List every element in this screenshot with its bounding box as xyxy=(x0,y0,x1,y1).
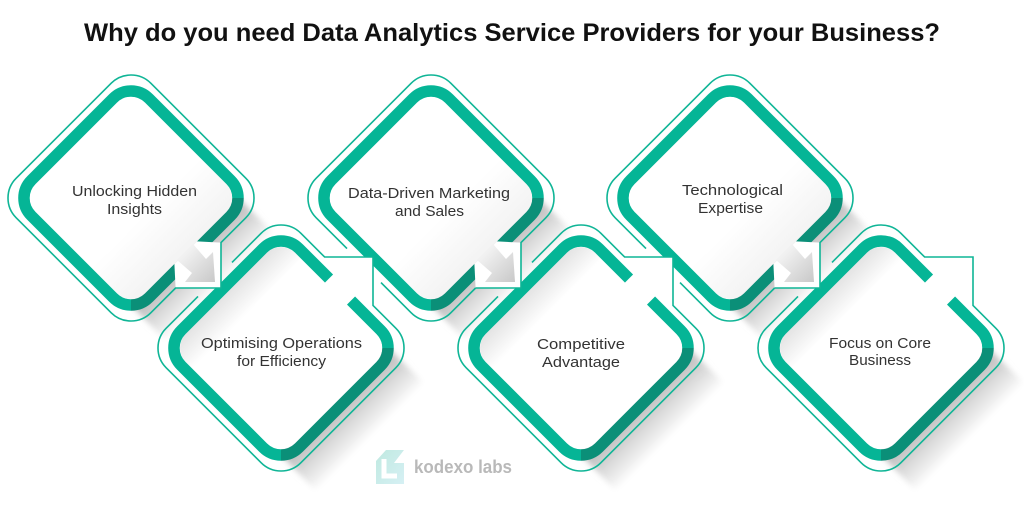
logo: kodexo labs: kodexo labs xyxy=(414,457,512,477)
panel: Focus on Core Business: Business xyxy=(849,353,911,369)
panel: Data-Driven Marketing and Sales: and Sales xyxy=(395,204,464,220)
panel: Data-Driven Marketing and Sales xyxy=(308,75,554,321)
panel: Focus on Core Business: Focus on Core xyxy=(829,336,931,352)
title: Why do you need Data Analytics Service Providers for your Business? xyxy=(84,19,940,47)
drop shadows behind the diamonds xyxy=(131,198,1023,490)
panel: Unlocking Hidden Insights: Insights xyxy=(107,202,162,218)
panel: Technological Expertise xyxy=(607,75,853,321)
icon: logo mark xyxy=(376,450,404,484)
panel: Unlocking Hidden Insights xyxy=(8,75,254,321)
panel: Competitive Advantage: Advantage xyxy=(542,355,620,371)
panel: Optimising Operations for Efficiency xyxy=(158,225,404,471)
panel: Competitive Advantage: Competitive xyxy=(537,337,625,353)
panel: Optimising Operations for Efficiency: for Efficiency xyxy=(237,354,327,370)
logo: kodexo labs xyxy=(376,450,512,484)
panel: Competitive Advantage xyxy=(458,225,704,471)
panel: Technological Expertise: Technological xyxy=(682,183,783,199)
panel: Optimising Operations for Efficiency: Optimising Operations xyxy=(201,336,362,352)
panel: Technological Expertise: Expertise xyxy=(698,201,763,217)
panel: Focus on Core Business xyxy=(758,225,1004,471)
panel: Unlocking Hidden Insights: Unlocking Hidden xyxy=(72,184,197,200)
panel: Data-Driven Marketing and Sales: Data-Driven Marketing xyxy=(348,186,510,202)
